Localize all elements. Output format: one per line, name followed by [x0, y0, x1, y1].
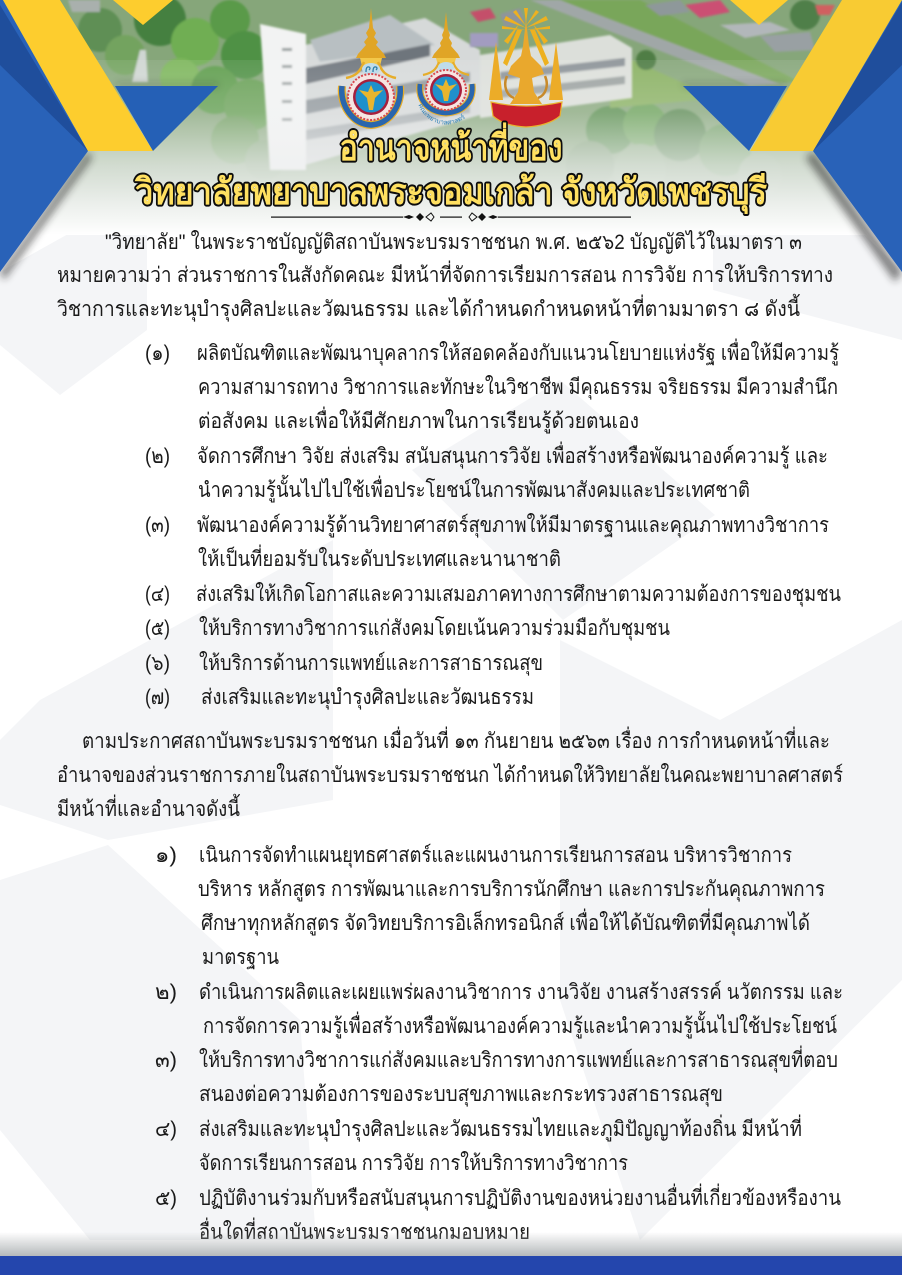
college item 3: สนองต่อความต้องการของระบบสุขภาพและกระทรวงสาธารณสุข: [199, 1083, 723, 1107]
college item 5: [155, 1183, 841, 1244]
college item 2: [155, 980, 843, 1039]
college item 4: ส่งเสริมและทะนุบำรุงศิลปะและวัฒนธรรมไทยและภูมิปัญญาท้องถิ่น มีหน้าที่: [199, 1114, 802, 1142]
tree canopy lower right: [560, 0, 820, 197]
item 3: (๓): [145, 514, 170, 537]
title line 2: วิทยาลัยพยาบาลพระจอมเกล้า จังหวัดเพชรบุรี: [134, 171, 768, 215]
footer bar: [0, 1256, 902, 1275]
main building: [260, 15, 632, 170]
second paragraph: มีหน้าที่และอำนาจดังนี้: [57, 794, 240, 821]
emblem: left institute crest: [342, 8, 400, 125]
intro paragraph: หมายความว่า ส่วนราชการในสังกัดคณะ มีหน้าที่จัดการเรียมการสอน การวิจัย การให้บริการทาง: [57, 260, 833, 287]
left corner shapes: [0, 0, 218, 272]
title line 1: อำนาจหน้าที่ของ: [340, 122, 562, 168]
college item 1: ๑): [155, 844, 177, 867]
college item 1: เนินการจัดทำแผนยุทธศาสตร์และแผนงานการเรียนการสอน บริหารวิชาการ: [199, 843, 792, 868]
item 5: ให้บริการทางวิชาการแก่สังคมโดยเน้นความร่วมมือกับชุมชน: [199, 616, 670, 641]
item 2: นำความรู้นั้นไปไปใช้เพื่อประโยชน์ในการพัฒนาสังคมและประเทศชาติ: [198, 475, 750, 503]
right corner shapes: [683, 0, 902, 272]
college item 3: [155, 1045, 838, 1107]
neighbouring houses: [470, 0, 835, 52]
crest caption: คณะพยาบาลศาสตร์: [418, 104, 465, 125]
emblem: nursing faculty crest: [416, 12, 476, 125]
intro paragraph: [57, 230, 833, 322]
item 7: ส่งเสริมและทะนุบำรุงศิลปะและวัฒนธรรม: [201, 686, 534, 710]
road: [530, 0, 780, 86]
item 1: ต่อสังคม และเพื่อให้มีศักยภาพในการเรียนรู้ด้วยตนเอง: [198, 406, 639, 434]
item 6: (๖): [145, 652, 170, 675]
item 2: [145, 441, 828, 503]
college item 3: ๓): [155, 1049, 177, 1072]
list: college duties 1-5: [155, 843, 843, 1244]
intro paragraph: วิชาการและทะนุบำรุงศิลปะและวัฒนธรรม และได้กำหนดกำหนดหน้าที่ตามมาตรา ๘ ดังนี้: [57, 294, 800, 322]
item 6: ให้บริการด้านการแพทย์และการสาธารณสุข: [199, 651, 543, 676]
item 3: ให้เป็นที่ยอมรับในระดับประเทศและนานาชาติ: [198, 544, 561, 571]
item 3: [145, 513, 829, 571]
college item 4: ๔): [155, 1118, 177, 1141]
college item 5: ๕): [155, 1187, 177, 1210]
aerial campus photo: [0, 0, 902, 235]
college item 1: ศึกษาทุกหลักสูตร จัดวิทยบริการอิเล็กทรอนิกส์ เพื่อให้ได้บัณฑิตที่มีคุณภาพได้: [201, 908, 810, 936]
item 2: (๒): [145, 445, 170, 468]
college item 2: ๒): [155, 981, 177, 1004]
intro paragraph: "วิทยาลัย" ในพระราชบัญญัติสถาบันพระบรมราชชนก พ.ศ. ๒๕๖2 บัญญัติไว้ในมาตรา ๓: [105, 230, 802, 254]
college item 5: ปฏิบัติงานร่วมกับหรือสนับสนุนการปฏิบัติงานของหน่วยงานอื่นที่เกี่ยวข้องหรืองาน: [199, 1183, 841, 1211]
item 7: (๗): [145, 686, 170, 709]
footer shadow: [0, 1232, 902, 1256]
item 4: (๔): [145, 583, 170, 606]
shadows behind corner shapes: [0, 84, 902, 282]
college item 4: จัดการเรียนการสอน การวิจัย การให้บริการทางวิชาการ: [199, 1151, 628, 1175]
ornament divider: [271, 213, 631, 221]
second paragraph: ตามประกาศสถาบันพระบรมราชชนก เมื่อวันที่ ๑๓ กันยายน ๒๕๖๓ เรื่อง การกำหนดหน้าที่และ: [82, 726, 830, 753]
item 1: (๑): [145, 342, 170, 365]
item 2: จัดการศึกษา วิจัย ส่งเสริม สนับสนุนการวิจัย เพื่อสร้างหรือพัฒนาองค์ความรู้ และ: [197, 441, 828, 469]
emblem: royal Praboromarajchanok crest: [489, 8, 563, 127]
tree canopy left: [68, 0, 285, 180]
college item 1: [155, 843, 825, 969]
item 3: พัฒนาองค์ความรู้ด้านวิทยาศาสตร์สุขภาพให้มีมาตรฐานและคุณภาพทางวิชาการ: [197, 513, 829, 538]
college item 5: อื่นใดที่สถาบันพระบรมราชชนกมอบหมาย: [199, 1217, 530, 1244]
college item 1: มาตรฐาน: [202, 946, 279, 969]
college item 1: บริหาร หลักสูตร การพัฒนาและการบริการนักศึกษา และการประกันคุณภาพการ: [198, 878, 825, 902]
college item 4: [155, 1114, 802, 1175]
item 5: (๕): [145, 617, 170, 640]
list: statutory duties 1-7: [145, 338, 841, 710]
item 1: [145, 338, 839, 434]
photo fade: [0, 60, 902, 235]
second paragraph: [57, 726, 843, 821]
